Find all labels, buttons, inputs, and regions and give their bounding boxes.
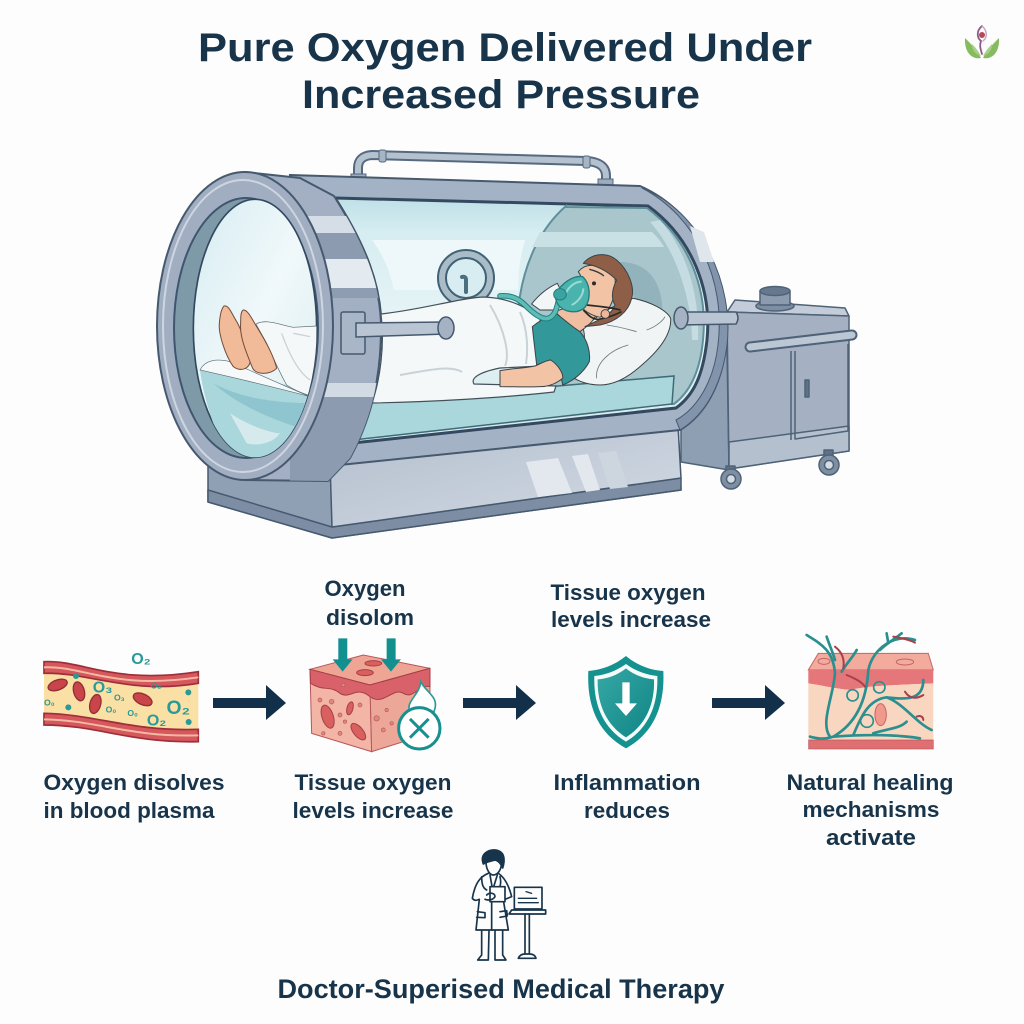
feet bbox=[219, 306, 277, 373]
icon: blood vessel with oxygen: O₂ bbox=[147, 712, 166, 729]
front window interior bbox=[193, 199, 317, 470]
cart rail bbox=[750, 335, 852, 347]
instrument cart bbox=[681, 286, 852, 489]
icon: blood vessel with oxygen: O₀ bbox=[44, 697, 55, 707]
icon: healing tissue with vessels bbox=[807, 633, 933, 749]
icon: blood vessel with oxygen bbox=[44, 651, 198, 742]
step 2 heading: disolom bbox=[326, 605, 414, 630]
patient upper body bbox=[500, 255, 671, 387]
arrow 2 bbox=[463, 685, 536, 720]
label: step 2 bbox=[292, 770, 454, 823]
oxygen mask bbox=[500, 276, 589, 319]
label: step 3 bbox=[554, 770, 700, 823]
face bbox=[578, 265, 615, 317]
label: step 4: mechanisms bbox=[802, 797, 940, 822]
blanket bbox=[372, 297, 556, 403]
icon: logo hands and figure bbox=[965, 26, 999, 58]
step 3 heading bbox=[550, 580, 711, 632]
label: step 1 bbox=[44, 770, 224, 823]
title bbox=[198, 26, 812, 117]
chamber base bbox=[208, 423, 681, 538]
label: step 3: reduces bbox=[584, 798, 670, 823]
label: step 4: activate bbox=[826, 825, 916, 850]
neck bbox=[555, 307, 597, 332]
eye and brow bbox=[592, 281, 596, 285]
cart knob bbox=[756, 286, 794, 311]
pressure dial bbox=[438, 250, 494, 306]
cart wheels bbox=[721, 450, 839, 489]
icon: blood vessel with oxygen: O₃ bbox=[93, 680, 113, 697]
icon: tissue block with oxygen arrows bbox=[310, 638, 440, 752]
icon: blood vessel with oxygen: O₃ bbox=[114, 693, 125, 703]
icon: blood vessel with oxygen: O₀ bbox=[127, 708, 138, 718]
glass highlight bbox=[372, 240, 525, 290]
title: Increased Pressure bbox=[302, 73, 700, 117]
teal mattress through front window bbox=[200, 370, 310, 458]
icon: blood vessel with oxygen: O₂ bbox=[131, 651, 151, 668]
label: step 4: Natural healing bbox=[786, 770, 954, 795]
label: step 1: Oxygen disolves bbox=[44, 770, 224, 795]
white mattress top bbox=[200, 360, 310, 397]
icon: blood vessel with oxygen: O₀ bbox=[106, 705, 116, 715]
step 2 heading: Oxygen bbox=[324, 576, 406, 601]
label: step 2: levels increase bbox=[292, 798, 454, 823]
metal collar with stripes bbox=[245, 172, 390, 487]
chamber body shell bbox=[290, 175, 727, 466]
left support rod bbox=[341, 312, 454, 354]
patient bbox=[372, 255, 671, 403]
step 2 heading bbox=[324, 576, 414, 630]
right support rod bbox=[674, 307, 738, 329]
pillow bbox=[532, 283, 671, 385]
step 3 heading: Tissue oxygen bbox=[550, 580, 706, 605]
chamber handle pipe bbox=[351, 150, 613, 187]
hair bbox=[583, 255, 633, 327]
rear opening bbox=[517, 206, 704, 404]
hyperbaric chamber illustration bbox=[157, 150, 852, 538]
arrow 1 bbox=[213, 685, 286, 720]
shirt bbox=[532, 313, 590, 385]
chamber side band bbox=[642, 188, 728, 430]
label: step 1: in blood plasma bbox=[44, 798, 215, 823]
label: step 2: Tissue oxygen bbox=[294, 770, 452, 795]
icon: blood vessel with oxygen: O₀ bbox=[151, 681, 161, 691]
icon: doctor with monitor bbox=[472, 850, 546, 960]
arm bbox=[500, 360, 563, 387]
arrow 3 bbox=[712, 685, 785, 720]
mattress bbox=[353, 376, 674, 440]
title: Pure Oxygen Delivered Under bbox=[198, 26, 812, 70]
front ring bbox=[157, 172, 333, 480]
step 3 heading: levels increase bbox=[551, 607, 711, 632]
label: step 4 bbox=[786, 770, 954, 850]
chamber window bbox=[335, 198, 708, 443]
icon: blood vessel with oxygen: O₂ bbox=[167, 698, 190, 719]
label: step 3: Inflammation bbox=[554, 770, 700, 795]
blanket through front window bbox=[256, 322, 317, 397]
icon: shield with down arrow bbox=[588, 656, 663, 748]
footer caption: Doctor-Superised Medical Therapy bbox=[278, 974, 725, 1004]
strap and ear bbox=[583, 305, 622, 319]
